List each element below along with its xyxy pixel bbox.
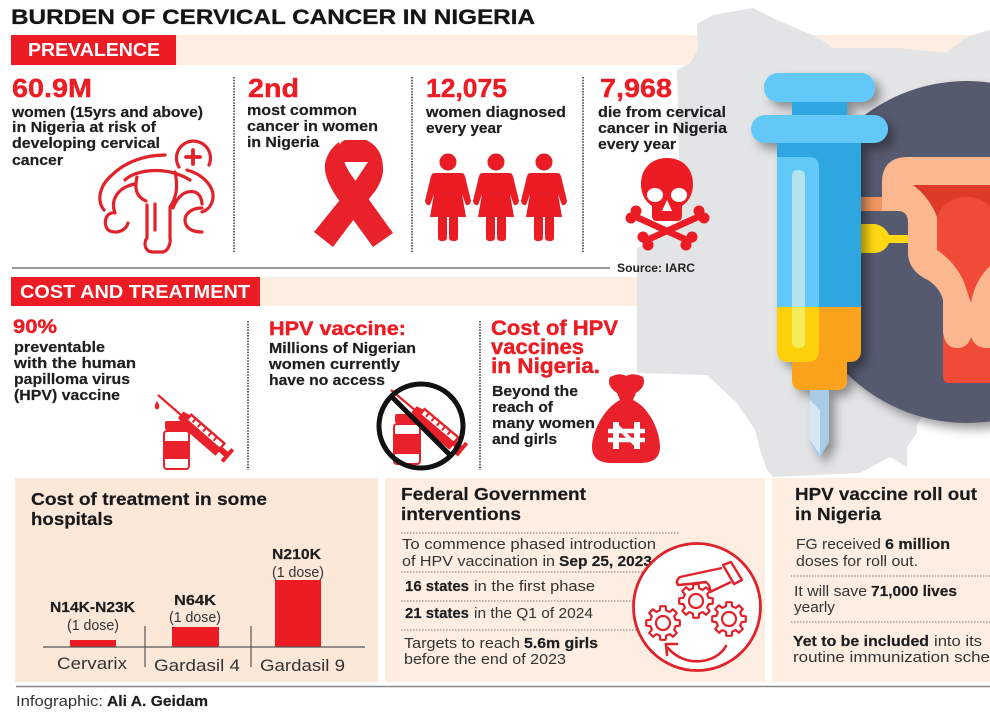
intervention list: in the first phase: [474, 578, 595, 595]
icon: skull and crossbones: [626, 158, 710, 250]
stat: HPV vaccine no access: have no access: [269, 372, 385, 389]
stat: 7,968 die from cervical cancer: cancer in Nigeria: [598, 120, 728, 137]
plunger stem: [792, 100, 847, 118]
stat: 2nd most common cancer: in Nigeria: [247, 134, 320, 151]
icon: hand and gears in circle: [634, 544, 760, 670]
icon: awareness ribbon: [314, 140, 393, 247]
panel: federal government interventions: [385, 478, 765, 682]
stat: cost of HPV vaccines: and girls: [492, 431, 557, 448]
stat: 12,075 women diagnosed: [425, 73, 566, 137]
bar chart: [43, 546, 365, 675]
stat: 60.9M women at risk: women (15yrs and above): [11, 104, 203, 121]
uterus lower red section: [943, 335, 990, 383]
stat: 2nd most common cancer: most common: [247, 102, 357, 119]
stat: 2nd most common cancer: 2nd: [248, 73, 299, 103]
stat: cost of HPV vaccines: Cost of HPV: [491, 317, 618, 340]
intervention list: To commence phased introduction: [402, 536, 656, 553]
woman 3: [521, 154, 567, 241]
section header: prevalence: PREVALENCE: [28, 40, 160, 60]
stat: 90% preventable: with the human: [13, 355, 136, 372]
stat: 12,075 women diagnosed: 12,075: [426, 73, 507, 103]
credit line: Ali A. Geidam: [107, 693, 208, 710]
icon: naira money bag: [592, 374, 660, 463]
heading: hospitals: [31, 509, 113, 529]
nozzle: [792, 355, 847, 390]
barrel highlight: [792, 170, 805, 307]
panel: HPV vaccine roll out in Nigeria: [772, 478, 990, 682]
stat: 90% preventable: [13, 317, 136, 404]
roll out facts: It will save: [794, 583, 867, 600]
intervention list: 16 states: [405, 578, 469, 595]
intervention list: 21 states: [405, 605, 469, 622]
stat: 7,968 die from cervical cancer: [598, 73, 728, 153]
stat: 7,968 die from cervical cancer: every year: [598, 136, 676, 153]
stat: HPV vaccine no access: Millions of Nigerian: [269, 340, 416, 357]
woman 1: [425, 154, 471, 241]
bar chart: N64K: [174, 592, 216, 609]
stat: 12,075 women diagnosed: women diagnosed: [425, 104, 566, 121]
stat: HPV vaccine no access: women currently: [268, 356, 401, 373]
heading: interventions: [401, 504, 521, 524]
syringe illustration: [751, 73, 888, 458]
medical illustration: uterus in dark circle: [796, 81, 990, 423]
stat: 60.9M women at risk: developing cervical: [12, 135, 160, 152]
intervention list: Targets to reach: [404, 635, 520, 652]
stat: 2nd most common cancer: cancer in women: [247, 118, 378, 135]
bar chart: N210K: [272, 546, 321, 563]
icon: crossed-out vaccine: [379, 384, 468, 468]
stat: HPV vaccine no access: HPV vaccine:: [269, 319, 406, 340]
stat: 2nd most common cancer: [247, 73, 378, 151]
heading: in Nigeria: [795, 504, 881, 524]
yellow instrument tip: [861, 224, 908, 253]
stat: 7,968 die from cervical cancer: die from cervical: [598, 104, 726, 121]
intervention list: Sep 25, 2023: [559, 553, 652, 570]
icon: three women: [425, 154, 567, 241]
stat: cost of HPV vaccines: vaccines: [491, 336, 584, 359]
stat: 60.9M women at risk: in Nigeria at risk of: [12, 119, 157, 136]
map of Nigeria: [637, 8, 990, 477]
roll out facts: [793, 536, 990, 666]
intervention list: in the Q1 of 2024: [474, 605, 593, 622]
prevalence background band: [11, 35, 990, 65]
stat: 12,075 women diagnosed: every year: [426, 120, 502, 137]
stat: 90% preventable: preventable: [14, 339, 105, 356]
stat: cost of HPV vaccines: many women: [492, 415, 595, 432]
cost and treatment background band: [11, 277, 651, 306]
intervention list: [402, 536, 656, 668]
intervention list: before the end of 2023: [404, 651, 566, 668]
icon: uterus outline with plus: [100, 141, 213, 252]
bar chart: Gardasil 9: [260, 656, 345, 675]
woman 2: [473, 154, 519, 241]
heading: [401, 484, 586, 524]
stat: 90% preventable: papilloma virus: [14, 371, 130, 388]
heading: HPV vaccine roll out: [795, 484, 977, 504]
needle: [810, 388, 829, 458]
roll out facts: routine immunization sche: [793, 649, 990, 666]
icon: vaccine vial and syringe: [153, 389, 234, 469]
heading: [795, 484, 977, 524]
stat: 60.9M women at risk: [11, 73, 203, 169]
stat: HPV vaccine no access: [268, 319, 416, 389]
stat: 60.9M women at risk: cancer: [12, 152, 63, 169]
flange: [751, 115, 888, 143]
stat: 90% preventable: (HPV) vaccine: [14, 387, 120, 404]
stat: 90% preventable: 90%: [13, 317, 57, 338]
heading: Cost of treatment in some: [31, 489, 267, 509]
stat: cost of HPV vaccines: [491, 317, 618, 448]
roll out facts: 71,000 lives: [871, 583, 957, 600]
credit line: Infographic:: [16, 693, 103, 710]
heading: Federal Government: [401, 484, 586, 504]
roll out facts: yearly: [794, 599, 836, 616]
roll out facts: into its: [934, 633, 982, 650]
bar chart: (1 dose): [169, 609, 221, 626]
bar chart: Cervarix: [57, 654, 128, 673]
barrel: [777, 140, 861, 310]
uterus lining: [937, 197, 990, 303]
intervention list: of HPV vaccination in: [402, 553, 555, 570]
roll out facts: 6 million: [885, 536, 950, 553]
source note: Source: IARC: [617, 263, 695, 275]
bar chart: (1 dose): [272, 564, 324, 581]
fallopian tube connector: [858, 197, 886, 211]
bar chart: Gardasil 4: [154, 656, 240, 675]
panel: cost of treatment in some hospitals: [15, 478, 378, 682]
uterus dark cavity: [913, 185, 990, 250]
stat: cost of HPV vaccines: reach of: [492, 399, 554, 416]
title: BURDEN OF CERVICAL CANCER IN NIGERIA: [11, 5, 535, 29]
section header: cost and treatment: [11, 277, 260, 306]
section header: cost and treatment: COST AND TREATMENT: [20, 282, 250, 302]
plunger top plate: [764, 73, 875, 102]
intervention list: 5.6m girls: [524, 635, 598, 652]
stat: 7,968 die from cervical cancer: 7,968: [600, 73, 672, 103]
roll out facts: doses for roll out.: [796, 553, 918, 570]
roll out facts: FG received: [796, 536, 881, 553]
section header: prevalence: [11, 35, 176, 65]
heading: [31, 489, 267, 529]
stat: cost of HPV vaccines: in Nigeria.: [491, 355, 600, 378]
uterus outer tissue: [882, 157, 990, 348]
credit line: [16, 693, 208, 710]
stat: cost of HPV vaccines: Beyond the: [492, 383, 578, 400]
stat: 60.9M women at risk: 60.9M: [12, 73, 92, 103]
bar chart: N14K-N23K: [50, 599, 135, 616]
roll out facts: Yet to be included: [793, 633, 929, 650]
bar chart: (1 dose): [67, 617, 119, 634]
